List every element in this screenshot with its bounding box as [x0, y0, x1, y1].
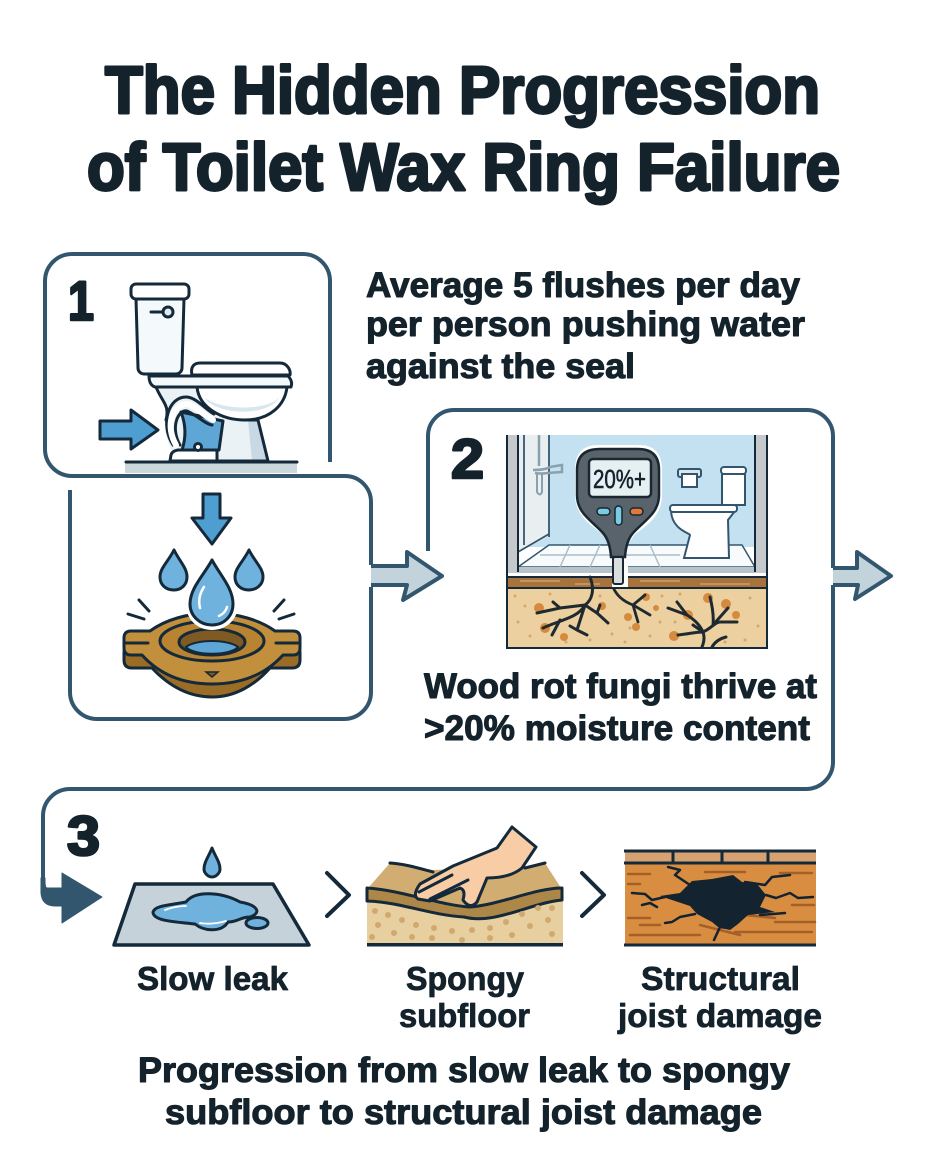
arrow: step 2 to step 3 [833, 552, 891, 599]
bathroom wall [518, 435, 755, 547]
title: of Toilet Wax Ring Failure [87, 130, 840, 205]
illustration: bathroom moisture reading [507, 435, 767, 648]
arrow: entry into step 3 [41, 873, 102, 923]
tiled floor [518, 545, 755, 573]
icon: wax ring with water drops [124, 550, 300, 697]
icon: structural joist damage [624, 851, 816, 945]
moisture meter: 20%+ [593, 464, 646, 494]
icon: slow leak [114, 848, 309, 945]
labels: progression stages: joist damage [617, 997, 822, 1034]
icon: pressure arrow [100, 410, 158, 449]
small toilet [670, 467, 746, 558]
shower enclosure [518, 435, 562, 552]
text: progression summary [138, 1051, 791, 1132]
toilet paper holder [678, 469, 701, 487]
panel: step 1 frame [45, 254, 371, 719]
text: progression summary: subfloor to structural joist damage [165, 1093, 762, 1132]
text: fungi moisture threshold [424, 667, 817, 748]
chevron [327, 873, 349, 916]
labels: progression stages: Structural [641, 960, 800, 997]
text: flush statistic: per person pushing water [366, 305, 805, 344]
labels: progression stages [137, 960, 822, 1034]
moisture meter [575, 445, 662, 587]
labels: progression stages: Spongy [406, 960, 525, 997]
arrow: step 1 to step 2 [371, 552, 442, 600]
wood subfloor [507, 577, 767, 588]
text: fungi moisture threshold: Wood rot fungi thrive at [424, 667, 817, 706]
icon: down arrow [192, 494, 231, 544]
step number 2: 2 [451, 427, 484, 490]
panel: step 2 frame [43, 410, 833, 880]
text: flush statistic [366, 266, 805, 386]
rotted sponge layer [507, 577, 767, 648]
text: flush statistic: Average 5 flushes per day [366, 266, 801, 305]
chevron [582, 873, 604, 916]
labels: progression stages: Slow leak [137, 960, 289, 997]
title: The Hidden Progression [105, 53, 820, 128]
icon: spongy subfloor with hand [367, 827, 563, 946]
labels: progression stages: subfloor [399, 997, 530, 1034]
title [87, 53, 840, 205]
text: fungi moisture threshold: >20% moisture content [424, 709, 810, 748]
text: progression summary: Progression from slow leak to spongy [138, 1051, 791, 1090]
step number 3: 3 [67, 804, 100, 867]
step number 1: 1 [68, 269, 94, 332]
icon: toilet side view [125, 284, 297, 473]
text: flush statistic: against the seal [366, 347, 635, 386]
wall columns [507, 435, 767, 648]
